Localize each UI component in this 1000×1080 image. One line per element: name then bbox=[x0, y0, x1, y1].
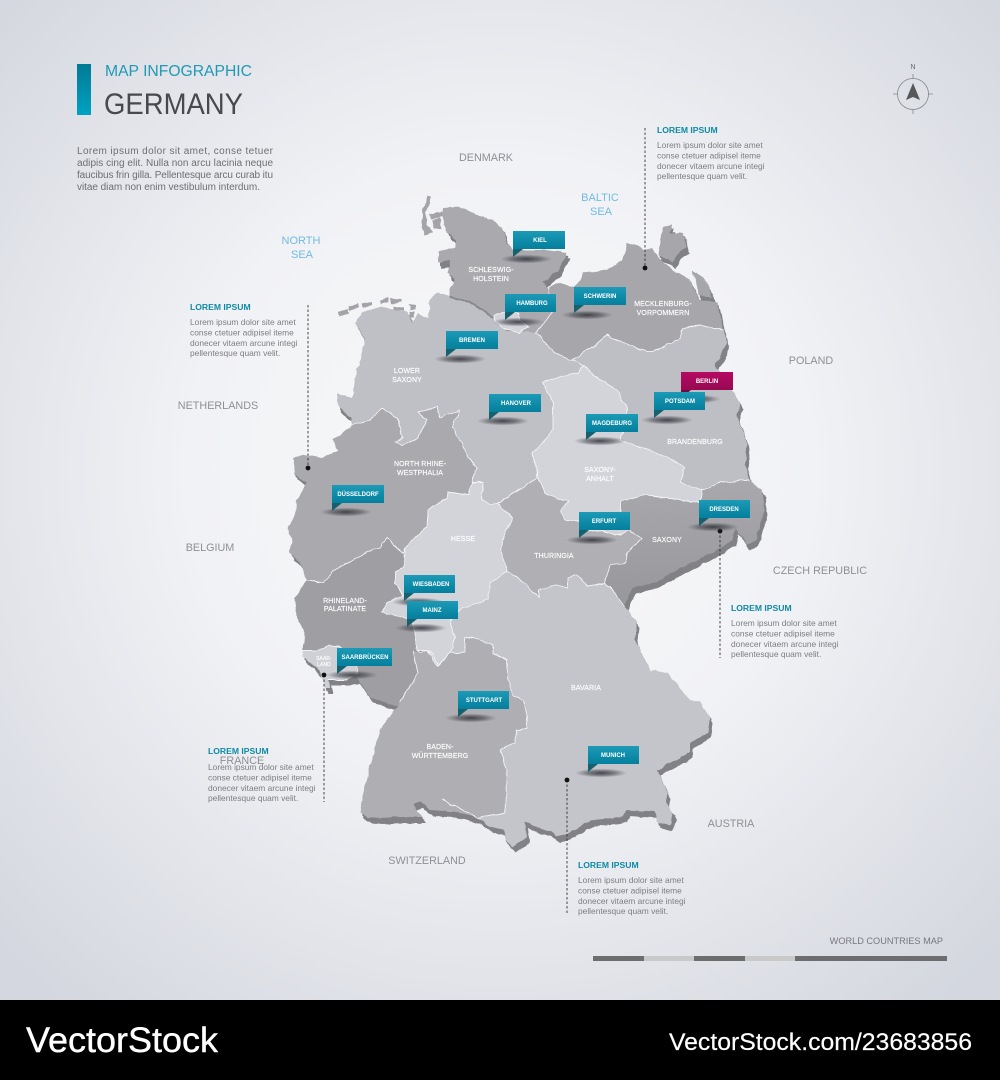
callout 3: south east bbox=[718, 529, 839, 659]
callout 1: north east: pellentesque quam velit. bbox=[657, 171, 747, 181]
neighbouring country labels: POLAND bbox=[789, 355, 833, 367]
neighbouring country labels: CZECH REPUBLIC bbox=[773, 565, 867, 577]
neighbouring country labels: SWITZERLAND bbox=[388, 855, 466, 867]
pin: Potsdam bbox=[641, 392, 705, 424]
sea labels: BALTIC bbox=[581, 192, 619, 204]
state names: RHINELAND- bbox=[323, 598, 367, 605]
pin: Düsseldorf: DÜSSELDORF bbox=[337, 491, 379, 498]
callout 3: south east: pellentesque quam velit. bbox=[731, 649, 821, 659]
pin: Mainz bbox=[395, 601, 458, 632]
state names: SCHLESWIG- bbox=[468, 267, 514, 274]
neighbouring country labels bbox=[178, 152, 867, 867]
state names: NORTH RHINE- bbox=[394, 461, 447, 468]
callout 1: north east bbox=[643, 125, 765, 270]
state names: HOLSTEIN bbox=[473, 276, 509, 283]
neighbouring country labels: FRANCE bbox=[220, 755, 264, 767]
pin: Saarbrücken bbox=[326, 648, 392, 680]
pin: Kiel: KIEL bbox=[533, 238, 547, 244]
state names bbox=[316, 267, 723, 760]
pin: Munich bbox=[575, 746, 639, 778]
footer bar: VectorStock.com/23683856 bbox=[669, 1029, 972, 1056]
state names: HESSE bbox=[451, 536, 475, 543]
callout 2: north west: conse ctetuer adipisel iteme bbox=[190, 328, 294, 338]
state names: PALATINATE bbox=[324, 606, 366, 613]
footer bar bbox=[0, 1000, 1000, 1080]
pin: Stuttgart bbox=[445, 691, 509, 722]
pin: Magdeburg: MAGDEBURG bbox=[592, 421, 632, 427]
callout 3: south east: Lorem ipsum dolor site amet bbox=[731, 618, 837, 628]
neighbouring country labels: BELGIUM bbox=[186, 542, 234, 554]
callout 2: north west: donecer vitaem arcune integi bbox=[190, 338, 298, 348]
state names: VORPOMMERN bbox=[637, 310, 689, 317]
callout 2: north west: LOREM IPSUM bbox=[190, 302, 251, 312]
intro text: faucibus frin gilla. Pellentesque arcu curab itu bbox=[77, 170, 273, 181]
callout 4: south west: pellentesque quam velit. bbox=[208, 793, 298, 803]
pin: Wiesbaden bbox=[392, 575, 455, 606]
state names: SAXONY bbox=[652, 537, 682, 544]
callout 5: south: Lorem ipsum dolor site amet bbox=[578, 875, 684, 885]
pin: Schwerin: SCHWERIN bbox=[584, 294, 616, 300]
neighbouring country labels: NETHERLANDS bbox=[178, 400, 258, 412]
pin: Düsseldorf bbox=[320, 485, 384, 516]
state names: LOWER bbox=[394, 368, 420, 375]
neighbouring country labels: DENMARK bbox=[459, 152, 514, 164]
callout 5: south: pellentesque quam velit. bbox=[578, 906, 668, 916]
callout 4: south west: Lorem ipsum dolor site amet bbox=[208, 762, 314, 772]
neighbouring country labels: AUSTRIA bbox=[708, 818, 755, 830]
state names: WÜRTTEMBERG bbox=[412, 752, 468, 760]
state names: MECKLENBURG- bbox=[634, 301, 692, 308]
state names: SAXONY bbox=[392, 377, 422, 384]
state names: LAND bbox=[317, 662, 331, 668]
callout 3: south east: donecer vitaem arcune integi bbox=[731, 639, 839, 649]
title block: MAP INFOGRAPHIC bbox=[105, 63, 252, 80]
pin: Hanover: HANOVER bbox=[501, 401, 532, 407]
intro text: Lorem ipsum dolor sit amet, conse tetuer bbox=[77, 146, 274, 157]
pin: Hanover bbox=[477, 394, 541, 426]
state names: BAVARIA bbox=[571, 685, 601, 692]
pin: Potsdam: POTSDAM bbox=[665, 399, 695, 405]
pin: Magdeburg bbox=[574, 414, 638, 446]
pin: Dresden bbox=[687, 500, 750, 532]
title block: GERMANY bbox=[104, 88, 243, 121]
callout 4: south west: LOREM IPSUM bbox=[208, 746, 269, 756]
callout 5: south: donecer vitaem arcune integi bbox=[578, 896, 686, 906]
pin: Schwerin bbox=[561, 287, 626, 320]
pin: Erfurt bbox=[566, 512, 630, 544]
pin: Munich: MUNICH bbox=[601, 753, 625, 759]
callout 1: north east: Lorem ipsum dolor site amet bbox=[657, 140, 763, 150]
pin: Wiesbaden: WIESBADEN bbox=[413, 582, 449, 588]
callout 4: south west bbox=[208, 673, 326, 803]
compass bbox=[893, 64, 933, 114]
callout 4: south west: conse ctetuer adipisel iteme bbox=[208, 772, 312, 782]
callout 1: north east: conse ctetuer adipisel iteme bbox=[657, 150, 761, 160]
pin: Kiel bbox=[500, 231, 565, 264]
title block bbox=[77, 63, 252, 121]
callout 5: south: LOREM IPSUM bbox=[578, 860, 639, 870]
callout 1: north east: LOREM IPSUM bbox=[657, 125, 718, 135]
callout 2: north west: pellentesque quam velit. bbox=[190, 348, 280, 358]
callout 5: south bbox=[565, 778, 686, 916]
pin: Erfurt: ERFURT bbox=[592, 519, 616, 525]
pin: Saarbrücken: SAARBRÜCKEN bbox=[341, 654, 389, 661]
intro text: adipis cing elit. Nulla non arcu lacinia neque bbox=[77, 158, 273, 169]
callout 3: south east: LOREM IPSUM bbox=[731, 603, 792, 613]
state names: BADEN- bbox=[426, 744, 454, 751]
map shapes bbox=[287, 196, 768, 853]
sea labels: SEA bbox=[590, 206, 613, 218]
callout 2: north west: Lorem ipsum dolor site amet bbox=[190, 317, 296, 327]
pin: Bremen bbox=[434, 331, 498, 364]
callout 2: north west bbox=[190, 302, 310, 470]
pin: Berlin: BERLIN bbox=[696, 379, 718, 385]
callout 3: south east: conse ctetuer adipisel iteme bbox=[731, 628, 835, 638]
pin: Dresden: DRESDEN bbox=[709, 507, 739, 513]
intro text bbox=[77, 146, 274, 193]
state names: SAAR- bbox=[316, 656, 332, 662]
state names: BRANDENBURG bbox=[667, 439, 723, 446]
pin: Hamburg: HAMBURG bbox=[516, 301, 548, 307]
compass: N bbox=[910, 64, 916, 71]
sea labels: NORTH bbox=[282, 235, 321, 247]
callout 5: south: conse ctetuer adipisel iteme bbox=[578, 886, 682, 896]
sea labels bbox=[282, 192, 619, 261]
pin: Stuttgart: STUTTGART bbox=[466, 698, 502, 704]
state names: THURINGIA bbox=[534, 553, 574, 560]
footer bar: VectorStock bbox=[26, 1020, 218, 1060]
pin: Hamburg bbox=[492, 294, 556, 326]
callout 4: south west: donecer vitaem arcune integi bbox=[208, 783, 316, 793]
state names: SAXONY- bbox=[584, 467, 616, 474]
scale bar bbox=[593, 936, 947, 961]
state names: ANHALT bbox=[586, 476, 614, 483]
callout 1: north east: donecer vitaem arcune integi bbox=[657, 161, 765, 171]
sea labels: SEA bbox=[291, 249, 314, 261]
scale bar: WORLD COUNTRIES MAP bbox=[830, 936, 943, 946]
map of Germany bbox=[287, 196, 768, 853]
pin: Mainz: MAINZ bbox=[422, 608, 442, 614]
pin: Berlin bbox=[669, 372, 733, 404]
pin: Bremen: BREMEN bbox=[459, 338, 485, 344]
state names: WESTPHALIA bbox=[397, 470, 443, 477]
intro text: vitae diam non enim vestibulum interdum. bbox=[77, 182, 260, 193]
